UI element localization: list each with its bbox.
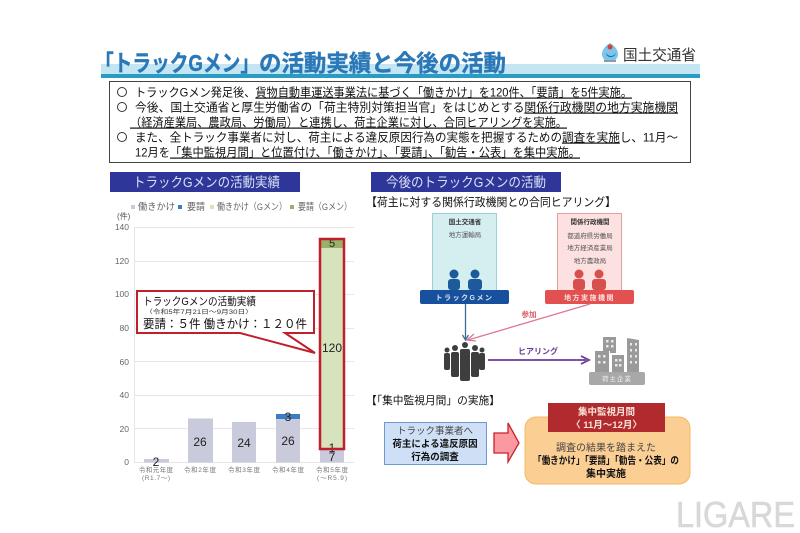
panel: regional implementing agencies: 地方実施機関 [564, 293, 615, 302]
summary text box [110, 82, 690, 162]
chart: activity results by fiscal year: 140 [115, 222, 129, 232]
banner: monitoring period [548, 403, 665, 432]
bar value labels: 2 [153, 455, 160, 469]
icon: officers red [573, 270, 606, 290]
icon: shipper companies buildings: 荷主企業 [602, 374, 632, 383]
logo: ministry mark and name: 国土交通省 [623, 47, 696, 64]
chart: activity results by fiscal year: 60 [120, 357, 129, 367]
subheading: monitoring period: 【「集中監視月間」の実施】 [366, 393, 500, 407]
x axis labels [139, 465, 348, 482]
bar value labels: 24 [237, 436, 251, 450]
chart: activity results by fiscal year: 0 [124, 457, 129, 467]
bar value labels: 120 [322, 341, 342, 355]
bars [144, 239, 344, 462]
chart legend: 要請 [187, 201, 205, 213]
panel: monitoring period actions: 調査の結果を踏まえた [556, 441, 656, 454]
panel: survey box: 荷主による違反原因 [392, 438, 478, 450]
chart: activity results by fiscal year: 40 [120, 390, 129, 400]
x axis labels: 令和元年度 [139, 465, 174, 474]
x axis labels: 令和3年度 [228, 465, 260, 474]
chart: activity results by fiscal year: 80 [120, 323, 129, 333]
chart legend: 要請（Gメン） [298, 201, 352, 213]
chart legend: 働きかけ [138, 201, 175, 213]
x axis labels: (R1.7～) [142, 475, 170, 482]
bar value labels [153, 238, 342, 469]
panel: MLIT regional bureau: 地方運輸局 [449, 230, 481, 239]
panel: survey box [384, 422, 486, 464]
bar value labels: 26 [193, 435, 207, 449]
banner: monitoring period: 集中監視月間 [578, 406, 635, 418]
x axis labels: 令和5年度 [316, 465, 348, 474]
chart legend [131, 201, 352, 213]
arrow: participation: 参加 [522, 309, 536, 319]
panel heading: activity results: トラックGメンの活動実績 [133, 175, 280, 190]
x axis labels: 令和2年度 [184, 465, 216, 474]
bar value labels: 1 [329, 441, 336, 455]
logo: ministry mark and name [602, 43, 696, 64]
callout: results total: 要請：５件 働きかけ：１２０件 [143, 317, 307, 331]
red outline around Gメン bar [320, 239, 344, 449]
panel: regional implementing agencies [545, 214, 634, 304]
icon: officers blue [448, 270, 482, 290]
panel: monitoring period actions: 集中実施 [586, 467, 626, 480]
chart: activity results by fiscal year: 20 [120, 424, 129, 434]
panel: MLIT regional bureau: トラックGメン [436, 293, 493, 302]
banner: monitoring period: 〈 11月～12月〉 [571, 420, 642, 431]
summary text box: また、全トラック事業者に対し、荷主による違反原因行為の実態を把握するための調査を実施し、11月～ [135, 130, 678, 144]
bar value labels: 7 [329, 450, 336, 464]
icon: group of people [444, 342, 485, 381]
panel: survey box: 行為の調査 [411, 451, 459, 463]
panel: regional implementing agencies: 都道府県労働局 [567, 231, 613, 240]
arrow: hearing: ヒアリング [518, 346, 558, 356]
panel heading: activity results [110, 172, 300, 192]
panel: monitoring period actions: 「働きかけ」「要請」「勧告・公表」の [533, 454, 679, 467]
arrow: participation [467, 304, 590, 341]
title [95, 50, 506, 76]
x axis labels: (～R5.9) [317, 475, 347, 482]
chart: activity results by fiscal year: 100 [115, 289, 129, 299]
callout: results total [137, 291, 315, 353]
panel: MLIT regional bureau: 国土交通省 [449, 217, 482, 226]
callout: results total: （令和5年7月21日～9月30日） [145, 308, 253, 316]
chart legend: 働きかけ（Gメン） [217, 201, 287, 213]
bar value labels: 5 [329, 238, 335, 250]
chart: activity results by fiscal year: (件) [117, 211, 131, 221]
callout: results total: トラックGメンの活動実績 [143, 294, 256, 308]
icon: shipper companies buildings [589, 337, 645, 385]
summary text box: （経済産業局、農政局、労働局）と連携し、荷主企業に対し、合同ヒアリングを実施。 [130, 114, 567, 130]
title: 「トラックGメン」 [95, 50, 259, 76]
x axis labels: 令和4年度 [272, 465, 304, 474]
summary text box: 今後、国土交通省と厚生労働省の「荷主特別対策担当官」をはじめとする関係行政機関の地方実施機関 [135, 100, 678, 114]
bar value labels: 26 [281, 434, 295, 448]
panel: regional implementing agencies: 地方経済産業局 [567, 243, 613, 252]
chart: activity results by fiscal year: 120 [115, 256, 129, 266]
panel: MLIT regional bureau [420, 214, 509, 304]
summary text box: 12月を「集中監視月間」と位置付け、「働きかけ」、「要請」、「勧告・公表」を集中実施。 [135, 144, 580, 160]
bar value labels: 3 [285, 410, 292, 424]
panel: regional implementing agencies: 地方農政局 [574, 256, 606, 265]
chart: activity results by fiscal year [115, 201, 354, 482]
subheading: joint hearings: 【荷主に対する関係行政機関との合同ヒアリング】 [366, 195, 616, 209]
arrow: survey to monitoring [494, 423, 519, 462]
arrow: Gメン to crowd [462, 304, 468, 340]
title: の活動実績と今後の活動 [259, 50, 506, 76]
title band [101, 64, 700, 78]
panel: monitoring period actions [525, 417, 690, 484]
panel: regional implementing agencies: 関係行政機関 [570, 217, 610, 226]
arrow: hearing [488, 346, 589, 364]
panel: survey box: トラック事業者へ [397, 425, 473, 437]
panel heading: future activities: 今後のトラックGメンの活動 [386, 175, 546, 190]
summary text box: トラックGメン発足後、貨物自動車運送事業法に基づく「働きかけ」を120件、「要請」を5件実施。 [135, 84, 632, 100]
panel heading: future activities [371, 172, 561, 192]
